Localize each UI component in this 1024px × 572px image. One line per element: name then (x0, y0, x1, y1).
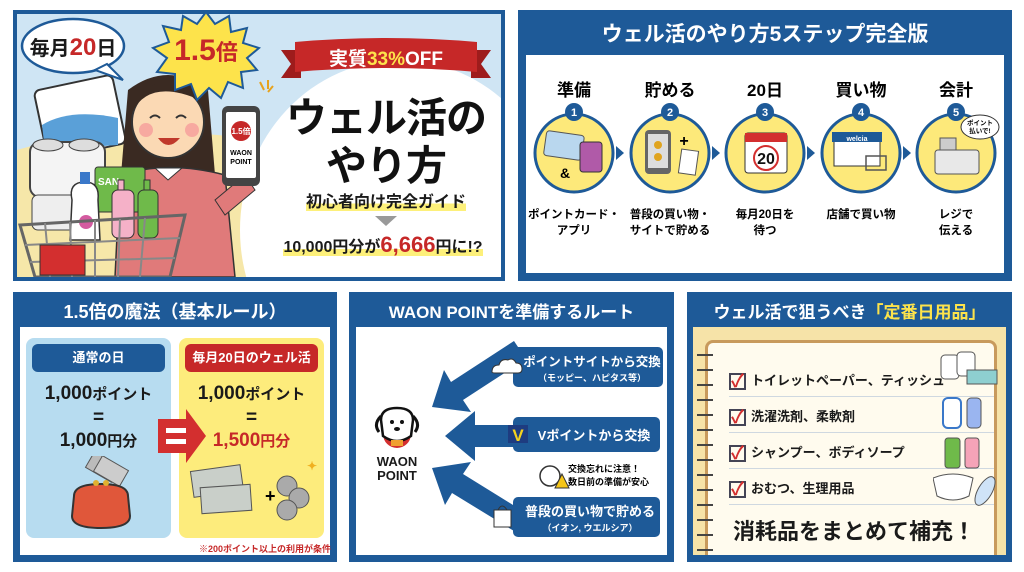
badge: 1.5x starburst (151, 14, 261, 102)
note: timer warning (540, 463, 649, 488)
panel: daily goods (687, 292, 1012, 562)
step 5: レジで (939, 208, 973, 221)
step 1: & (560, 165, 570, 181)
illustration: shopper (20, 74, 273, 277)
icon: bills and coins: ✦ (307, 459, 317, 473)
heading: ウェル活のやり方5ステップ完全版 (602, 23, 928, 46)
item: toilet paper: トイレットペーパー、ティッシュ (751, 373, 945, 388)
item: diapers: ✓ (731, 479, 744, 499)
icon: WAON dog logo: POINT (377, 468, 417, 483)
item: shampoo: シャンプー、ボディソープ (751, 445, 905, 460)
checklist (729, 371, 994, 505)
item: shampoo: ✓ (731, 443, 744, 463)
step 2: 貯める (644, 81, 696, 100)
arrow: equals (158, 409, 206, 463)
note: timer warning: 数日前の準備が安心 (568, 476, 649, 487)
notebook rings (697, 354, 713, 551)
callout: point site: ポイントサイトから交換 (523, 354, 661, 369)
panel: 1.5x rule (13, 292, 337, 562)
steps (528, 80, 1000, 237)
item: detergent (729, 403, 994, 433)
subtitle: 初心者向け完全ガイド (306, 194, 466, 211)
step 5: 払いで! (969, 126, 991, 135)
icon: WAON dog logo: WAON (377, 454, 417, 469)
step 4: 買い物 (836, 81, 886, 100)
callout: shopping: 普段の買い物で貯める (525, 504, 655, 519)
item: toilet paper (729, 367, 994, 397)
step 4 (822, 81, 900, 221)
item: diapers (729, 475, 994, 505)
step 3: 20日 (747, 81, 783, 100)
heading: 1.5倍の魔法（基本ルール） (63, 302, 287, 322)
card: 20th (179, 338, 324, 538)
text: conclusion: 消耗品をまとめて補充！ (733, 519, 975, 544)
icon: bills and coins: + (265, 486, 276, 506)
step 2: + (679, 133, 689, 150)
callout: V point: V (512, 426, 524, 445)
step 4: welcia (845, 136, 868, 143)
callout: shopping: （イオン, ウエルシア） (542, 523, 638, 533)
step 2 (630, 81, 710, 237)
step 1: アプリ (557, 224, 591, 237)
icon: WAON dog logo (374, 406, 420, 483)
step 1: 準備 (557, 80, 591, 100)
callout: point site: （モッピー、ハピタス等） (538, 372, 646, 383)
item: shampoo (729, 439, 994, 469)
step 1: 1 (571, 107, 577, 119)
step 5: ポイント (967, 119, 993, 127)
card: 20th: 1,000ポイント (198, 383, 305, 404)
illustration: shopper: POINT (230, 159, 252, 166)
banner: 33% OFF (281, 38, 491, 78)
text: savings: 10,000円分が6,666円に!? (283, 232, 483, 257)
callout: monthly 20th (20, 18, 126, 81)
card: 20th: = (246, 407, 257, 428)
step 2: 2 (667, 107, 673, 119)
icons: goods (933, 352, 998, 506)
badge: 1.5x starburst: 1.5倍 (174, 34, 238, 67)
step 5: 5 (953, 107, 959, 119)
footnote: ※200ポイント以上の利用が条件 (199, 544, 331, 554)
title: ウェル活のやり方: やり方 (326, 143, 446, 189)
title: ウェル活のやり方 (286, 95, 486, 189)
step 2: サイトで貯める (630, 223, 710, 237)
arrow: down triangle (375, 216, 397, 226)
item: detergent: 洗濯洗剤、柔軟剤 (751, 409, 855, 424)
step 5: 伝える (939, 223, 973, 237)
item: detergent: ✓ (731, 407, 744, 427)
panel: hero (13, 10, 505, 281)
panel: 5 steps (518, 10, 1012, 281)
step 4: 4 (858, 107, 865, 119)
callout: V point (508, 417, 660, 452)
arrows (432, 341, 663, 537)
step 1: ポイントカード・ (528, 208, 620, 221)
illustration: shopper: 1.5倍 (231, 126, 251, 136)
step 3 (726, 81, 804, 237)
card: 20th: 毎月20日のウェル活 (192, 350, 311, 365)
step 5: 会計 (939, 81, 973, 100)
step 3: 3 (762, 107, 768, 119)
item: diapers: おむつ、生理用品 (751, 481, 854, 496)
illustration: shopper: WAON (230, 150, 252, 157)
item: toilet paper: ✓ (731, 371, 744, 391)
title: ウェル活のやり方: ウェル活の (286, 95, 486, 141)
heading: WAON POINTを準備するルート (389, 303, 634, 322)
icon: purse (71, 456, 131, 529)
card: normal day: 1,000ポイント (45, 383, 152, 404)
icon: bills and coins (190, 459, 317, 520)
heading: ウェル活で狙うべき「定番日用品」 (714, 303, 986, 322)
callout: V point: Vポイントから交換 (538, 428, 650, 443)
callout: point site (492, 347, 663, 387)
step 2: 普段の買い物・ (630, 207, 710, 221)
step 4: 店舗で買い物 (826, 207, 896, 221)
card: normal day (26, 338, 171, 538)
note: timer warning: 交換忘れに注意！ (568, 463, 640, 474)
card: normal day: 通常の日 (72, 350, 124, 365)
card: normal day: 1,000円分 (60, 430, 137, 451)
panel: WAON POINT route (349, 292, 674, 562)
callout: monthly 20th: 毎月20日 (30, 34, 116, 61)
step 5 (917, 81, 999, 237)
step 3: 20 (757, 151, 775, 168)
step 3: 毎月20日を (736, 207, 794, 221)
step 3: 待つ (754, 223, 776, 237)
card: normal day: = (93, 407, 104, 428)
callout: shopping (494, 497, 660, 537)
illustration: shopper: SAN (98, 177, 119, 188)
banner: 33% OFF: 実質33%OFF (329, 49, 443, 70)
card: 20th: 1,500円分 (213, 430, 290, 451)
step 1 (528, 80, 620, 237)
